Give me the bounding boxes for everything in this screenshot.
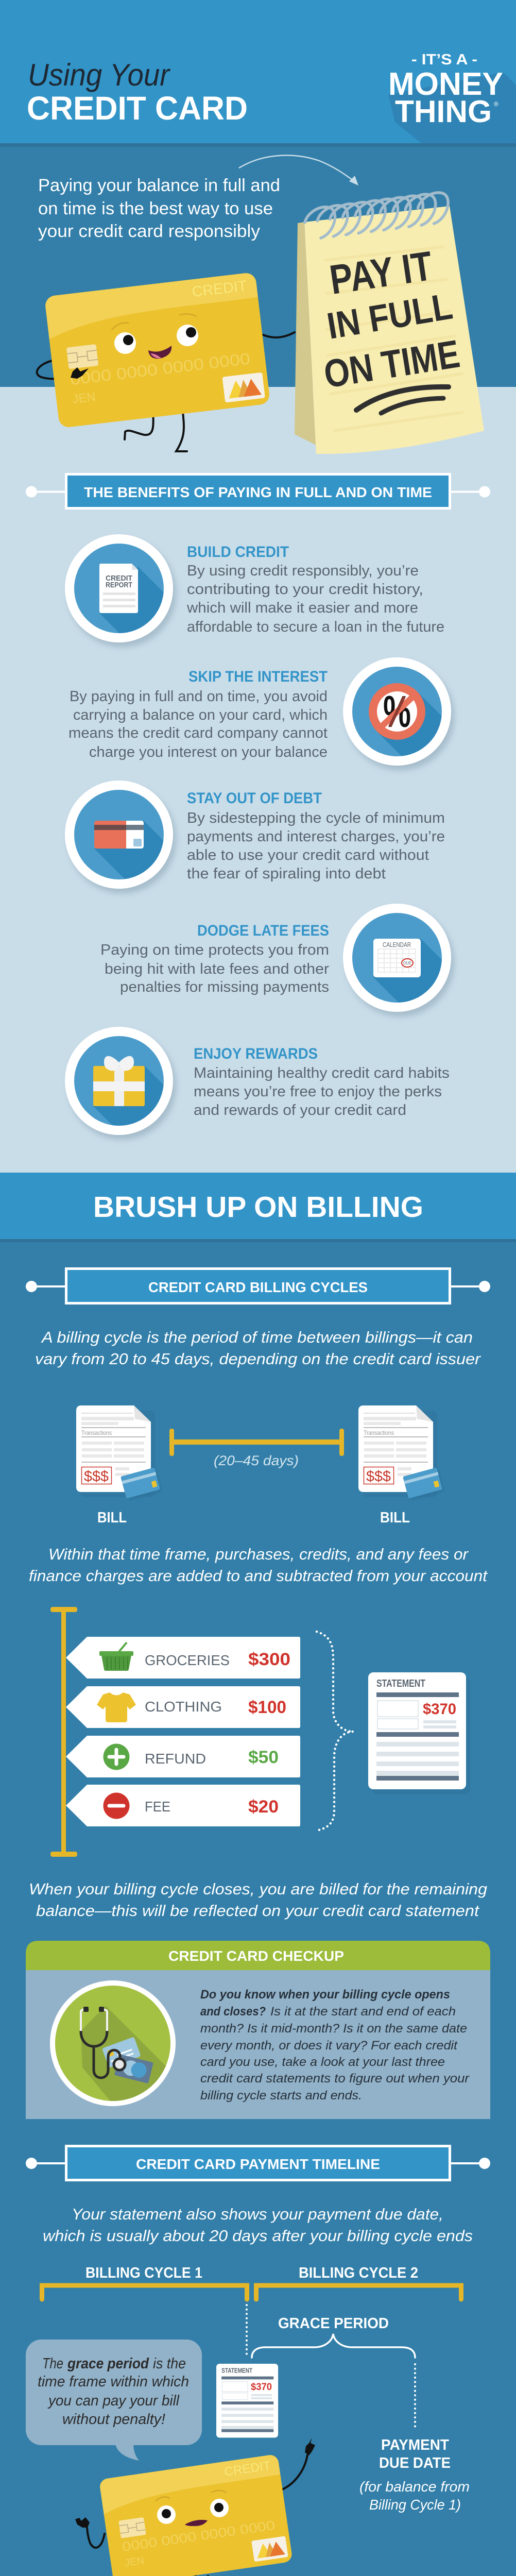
icon: credit card character waving: 0000 0000 0000 0000 (122, 2518, 276, 2554)
text block: able to use your credit card without (187, 847, 429, 863)
text block: charge you interest on your balance (89, 744, 328, 760)
bracket: billing cycle 2: BILLING CYCLE 2 (299, 2265, 418, 2281)
heading: DODGE LATE FEES (197, 922, 329, 939)
icon: split credit card (65, 781, 178, 895)
text block: billing cycle starts and ends. (200, 2089, 362, 2103)
callout: grace period speech bubble: without penalty! (62, 2411, 165, 2428)
icon: no percent: % (383, 687, 411, 737)
text block: carrying a balance on your card, which (73, 707, 328, 723)
icon: calendar: DUE (403, 961, 411, 965)
heading: brush up on billing: BRUSH UP ON BILLING (93, 1191, 423, 1224)
card body: JEN (72, 390, 96, 406)
text block: Is it at the start and end of each (270, 2005, 456, 2019)
intro text: Paying your balance in full and (38, 176, 280, 195)
tag: groceries (66, 1637, 300, 1679)
text block: every month, or does it vary? For each credit (200, 2039, 458, 2053)
text block: and rewards of your credit card (194, 1102, 406, 1118)
heading: benefits (26, 474, 490, 508)
notepad: pay it in full on time: IN FULL (324, 285, 455, 347)
text block: within that time frame: Within that time frame, purchases, credits, and any fees or (48, 1545, 469, 1563)
icon: statement small (216, 2364, 278, 2437)
text block: contributing to your credit history, (187, 581, 423, 598)
text block: billed when cycle closes (29, 1880, 487, 1920)
text block: month? Is it mid-month? Is it on the same date (200, 2022, 467, 2036)
range bar: 20 to 45 days: (20–45 days) (214, 1453, 299, 1468)
icon: bill left: $$$ (84, 1468, 109, 1485)
callout: grace period speech bubble: The (42, 2355, 63, 2372)
icon: no percent (343, 657, 456, 773)
icon: credit report: REPORT (106, 581, 132, 589)
text block: By sidestepping the cycle of minimum (187, 810, 445, 826)
tag: refund: REFUND (145, 1751, 206, 1767)
text block: billed when cycle closes: When your billing cycle closes, you are billed for the remaining (29, 1880, 487, 1898)
text block: affordable to secure a loan in the future (187, 619, 444, 635)
heading: credit card billing cycles (26, 1268, 490, 1303)
icon: credit card character waving (75, 2438, 315, 2576)
icon: basket (99, 1642, 133, 1671)
text block: Maintaining healthy credit card habits (194, 1065, 450, 1081)
tag: clothing (66, 1686, 300, 1728)
text block: credit card statements to figure out when your (200, 2072, 470, 2086)
tag: groceries: $300 (248, 1650, 290, 1669)
text block: means the credit card company cannot (68, 725, 328, 741)
callout: grace period speech bubble (26, 2340, 202, 2461)
bracket: billing cycle 2 (256, 2265, 461, 2299)
text block: billed when cycle closes: balance—this will be reflected on your credit card statement (36, 1902, 479, 1920)
icon: bill left: Transactions (81, 1429, 112, 1436)
text block (68, 688, 328, 760)
text block: within that time frame (29, 1545, 488, 1585)
panel: credit card checkup 1 (26, 1941, 490, 2129)
text block: means you’re free to enjoy the perks (194, 1083, 442, 1100)
panel: stay out of debt (65, 781, 444, 895)
heading: ENJOY REWARDS (194, 1045, 318, 1062)
card body: 0000 0000 0000 0000 (69, 349, 251, 388)
icon: bill right: $$$ (366, 1468, 391, 1485)
tag: fee: $20 (248, 1797, 279, 1817)
text block: card you use, take a look at your last three (200, 2055, 445, 2069)
text block: which will make it easier and more (186, 600, 418, 616)
tag: refund (66, 1736, 300, 1777)
callout: grace period speech bubble: time frame within which (38, 2374, 189, 2390)
notepad: pay it in full on time: PAY IT (327, 243, 435, 303)
label: payment due date (359, 2437, 470, 2513)
icon: gift (65, 1027, 178, 1142)
panel: credit card checkup 1: CREDIT CARD CHECKUP (168, 1948, 344, 1964)
grace period brace (252, 2315, 415, 2358)
panel: dodge late fees (102, 904, 456, 1019)
callout: grace period speech bubble: grace period (67, 2355, 149, 2372)
panel: skip the interest (69, 657, 456, 773)
intro text: your credit card responsibly (38, 222, 260, 241)
heading: payment timeline: CREDIT CARD PAYMENT TIMELINE (136, 2156, 380, 2172)
dotted brace to statement (317, 1632, 353, 1831)
dotted lines: timeline (247, 2305, 415, 2430)
text block: payment due date (43, 2205, 473, 2245)
text block (194, 1065, 450, 1118)
icon: bill right: Transactions (364, 1429, 394, 1436)
text block: Do you know when your billing cycle opens (200, 1988, 450, 2002)
icon: bill right (358, 1405, 445, 1501)
text block (186, 563, 444, 635)
text block: penalties for missing payments (120, 979, 329, 995)
callout: grace period speech bubble: you can pay your bill (47, 2393, 180, 2409)
icon: shirt (97, 1692, 136, 1722)
tag: clothing: $100 (248, 1698, 286, 1717)
title: Using Your (28, 58, 170, 92)
text block: billing cycle definition (35, 1328, 481, 1368)
text block (200, 1988, 470, 2103)
label: bill: BILL (97, 1510, 127, 1526)
timeline pole (50, 1607, 77, 1857)
title (27, 58, 248, 127)
bracket: billing cycle 1: BILLING CYCLE 1 (85, 2265, 202, 2281)
label: payment due date: Billing Cycle 1) (369, 2497, 461, 2513)
text block: billing cycle definition: vary from 20 to 45 days, depending on the credit card issuer (35, 1350, 481, 1368)
callout: grace period speech bubble: is the (153, 2355, 186, 2372)
tag: clothing: CLOTHING (145, 1699, 222, 1715)
legs and arms (37, 332, 295, 451)
panel: build credit (65, 534, 444, 649)
title: CREDIT CARD (27, 90, 248, 127)
heading: credit card billing cycles: CREDIT CARD BILLING CYCLES (148, 1279, 368, 1295)
text block: payment due date: which is usually about 20 days after your billing cycle ends (43, 2227, 473, 2245)
logo: It's a Money Thing: MONEY (388, 66, 503, 102)
text block: By paying in full and on time, you avoid (70, 688, 328, 705)
icon: calendar: CALENDAR (383, 941, 411, 948)
text block: and closes? (200, 2005, 266, 2019)
heading: benefits: THE BENEFITS OF PAYING IN FULL AND ON TIME (84, 484, 432, 500)
panel: enjoy rewards (65, 1027, 449, 1142)
text block: payment due date: Your statement also shows your payment due date, (72, 2205, 443, 2223)
icon: stethoscope on card (50, 1980, 176, 2106)
icon: calendar (343, 904, 456, 1019)
text block: within that time frame: finance charges are added to and subtracted from your account (29, 1567, 488, 1585)
tag: fee: FEE (145, 1799, 170, 1815)
text block: billing cycle definition: A billing cycle is the period of time between billings—it can (41, 1328, 473, 1346)
heading: BUILD CREDIT (187, 544, 289, 561)
notepad: pay it in full on time (295, 193, 484, 454)
tag: refund: $50 (248, 1748, 279, 1767)
intro text (38, 176, 280, 241)
text block: payments and interest charges, you’re (187, 828, 445, 845)
tag: groceries: GROCERIES (145, 1652, 230, 1668)
card body: CREDIT (191, 278, 248, 300)
icon: credit card character waving: CREDIT (223, 2459, 272, 2479)
icon: bill left (76, 1405, 163, 1501)
heading: payment timeline (26, 2146, 490, 2180)
icon: statement small: STATEMENT (221, 2367, 252, 2375)
text block (187, 810, 445, 882)
label: payment due date: DUE DATE (379, 2455, 451, 2471)
label: payment due date: PAYMENT (381, 2437, 449, 2453)
icon: credit report: CREDIT (106, 574, 132, 583)
logo: It's a Money Thing: - IT’S A - (411, 52, 477, 68)
notepad: pay it in full on time: ON TIME (321, 332, 462, 397)
label: payment due date: (for balance from (359, 2479, 470, 2495)
intro text: on time is the best way to use (38, 199, 273, 218)
heading: STAY OUT OF DEBT (187, 790, 322, 807)
icon: statement: $370 (423, 1701, 456, 1718)
logo: It's a Money Thing: THING (395, 94, 492, 129)
icon: minus (103, 1793, 130, 1819)
icon: statement small: $370 (251, 2382, 272, 2393)
icon: credit report (65, 534, 178, 649)
text block (100, 942, 329, 995)
face (112, 314, 198, 359)
logo: It's a Money Thing (388, 52, 516, 143)
icon: credit card character waving: JEN (124, 2555, 145, 2569)
text block: the fear of spiraling into debt (187, 866, 386, 882)
text block: being hit with late fees and other (105, 961, 329, 977)
bracket: billing cycle 1 (42, 2265, 247, 2299)
text block: Paying on time protects you from (100, 942, 329, 958)
tag: fee (66, 1785, 300, 1826)
arrow: intro to notepad (239, 156, 358, 185)
text block: By using credit responsibly, you’re (187, 563, 419, 579)
logo: It's a Money Thing: ® (494, 100, 498, 108)
label: bill: BILL (380, 1510, 410, 1526)
icon: plus (103, 1743, 130, 1770)
range bar: 20 to 45 days (169, 1429, 344, 1468)
icon: credit card character pointing (37, 272, 295, 451)
card body (44, 272, 270, 428)
icon: statement: STATEMENT (376, 1678, 425, 1689)
heading: SKIP THE INTEREST (188, 668, 328, 685)
grace period brace: GRACE PERIOD (278, 2315, 389, 2332)
icon: statement (368, 1672, 470, 1794)
